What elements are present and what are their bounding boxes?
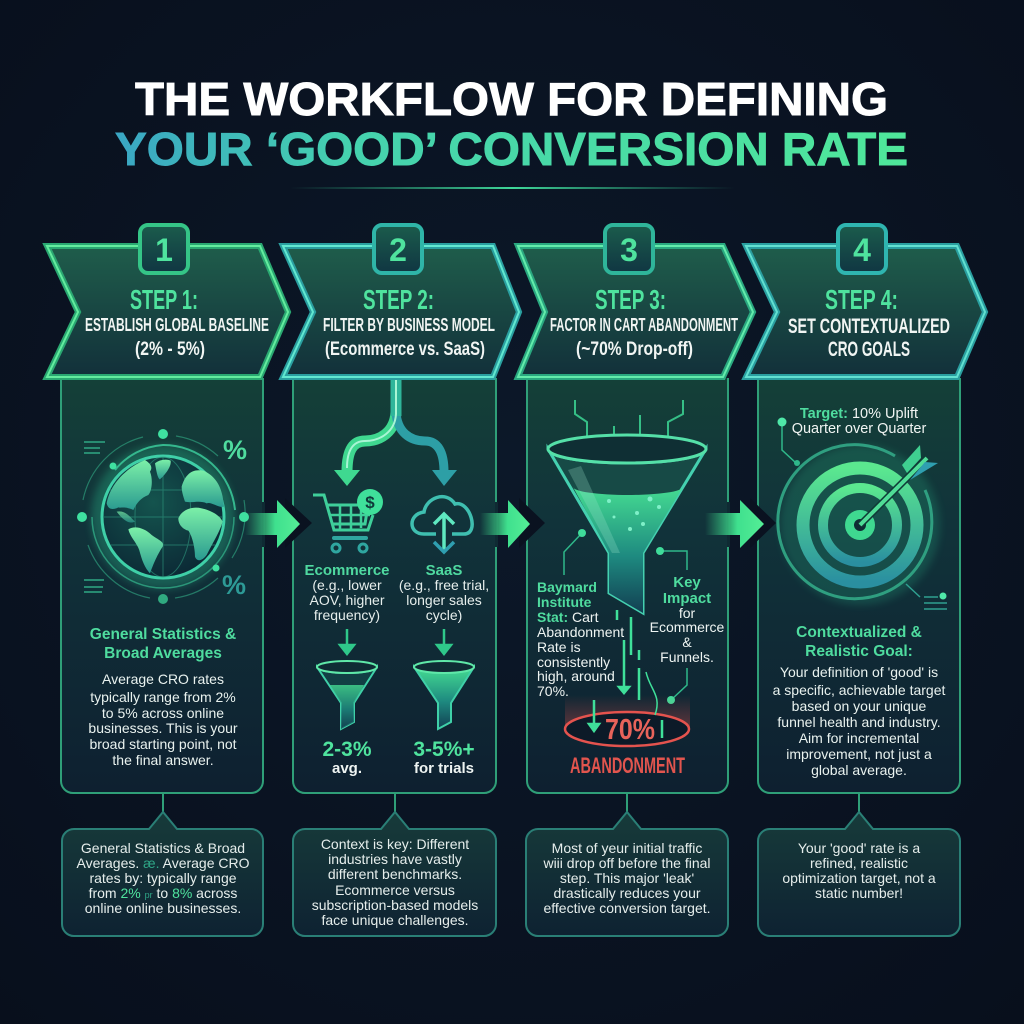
text: Ecommerce column: frequency) xyxy=(314,607,380,623)
text: SaaS column xyxy=(399,562,489,623)
chevron: step 3 xyxy=(518,246,753,377)
text: step 4 body: Aim for incremental xyxy=(799,730,919,746)
callout: step 4: Your 'good' rate is a xyxy=(798,840,920,856)
chevron: step 2: FILTER BY BUSINESS MODEL xyxy=(323,315,495,335)
text: step 1 body: to 5% across online xyxy=(102,705,224,721)
drips xyxy=(589,610,662,738)
callout: step 2: industries have vastly xyxy=(328,851,462,867)
chevron: step 2 xyxy=(283,246,519,377)
callout: step 3: effective conversion target. xyxy=(543,900,711,916)
text: Baymard stat: high, around xyxy=(537,668,615,684)
panel: step 2 body xyxy=(293,378,496,793)
number badge 4 xyxy=(838,225,886,273)
arrow: step 3 to 4 xyxy=(705,498,776,548)
callout: step 2: face unique challenges. xyxy=(321,912,469,928)
text: Baymard stat: consistently xyxy=(537,654,610,670)
text: Baymard stat: Rate is xyxy=(537,639,581,655)
title xyxy=(115,73,908,175)
callout: step 1 xyxy=(62,793,263,936)
number badge 4: 4 xyxy=(853,232,871,268)
text: step 4 body: global average. xyxy=(811,762,907,778)
text: step 4 body xyxy=(773,664,945,778)
stat: ecommerce: avg. xyxy=(332,760,362,777)
callout: step 3: drastically reduces your xyxy=(553,885,701,901)
title: YOUR ‘GOOD’ CONVERSION RATE xyxy=(115,123,908,175)
callout: step 2: Ecommerce versus xyxy=(335,882,455,898)
callout: step 3: step. This major 'leak' xyxy=(560,870,694,886)
icon: large funnel xyxy=(548,400,706,613)
callout: step 4 xyxy=(758,793,960,936)
number badge 1 xyxy=(140,225,188,273)
chevron: step 4 xyxy=(746,246,985,377)
text: step 4 body: based on your unique xyxy=(792,698,927,714)
callout: step 3: wiii drop off before the final xyxy=(542,855,711,871)
text: step 4 body: Your definition of 'good' is xyxy=(780,664,938,680)
callout: step 1: Averages. æ. Average CRO xyxy=(76,855,250,871)
stat: ecommerce xyxy=(322,738,372,777)
text: key impact: for xyxy=(679,605,696,621)
callout: step 2: Context is key: Different xyxy=(321,836,469,852)
text: Baymard stat xyxy=(537,579,624,699)
icon: target with arrow xyxy=(778,418,947,609)
text: Baymard stat: Abandonment xyxy=(537,624,624,640)
diagram: branching arrows to Ecommerce and SaaS xyxy=(334,380,457,486)
chevron: step 3: STEP 3: xyxy=(595,284,666,315)
text: step 4 body: funnel health and industry. xyxy=(777,714,941,730)
text: key impact: Impact xyxy=(663,590,711,607)
callout: step 4: refined, realistic xyxy=(810,855,908,871)
text: Baymard stat: Stat: Cart xyxy=(537,609,599,625)
number badge 3: 3 xyxy=(620,232,638,268)
icon: globe with orbit rings: % xyxy=(222,570,246,600)
text: SaaS column: (e.g., free trial, xyxy=(399,577,489,593)
chevron: step 1: (2% - 5%) xyxy=(135,339,205,360)
red abandonment pool: 70% xyxy=(605,714,655,746)
text: step 4 heading: Realistic Goal: xyxy=(805,643,913,660)
stat: ecommerce: 2-3% xyxy=(322,738,372,761)
text: step 1 body: Average CRO rates xyxy=(102,671,224,687)
number badge 2 xyxy=(374,225,422,273)
text: Ecommerce column: AOV, higher xyxy=(310,592,385,608)
text: Ecommerce column: (e.g., lower xyxy=(312,577,382,593)
icon: globe with orbit rings xyxy=(77,429,249,604)
callout: step 1: General Statistics & Broad xyxy=(81,840,245,856)
chevron: step 1: ESTABLISH GLOBAL BASELINE xyxy=(85,315,269,335)
text: Ecommerce column: Ecommerce xyxy=(304,562,390,579)
stat: saas: for trials xyxy=(414,760,474,777)
text: Baymard stat: Institute xyxy=(537,594,592,610)
text: SaaS column: longer sales xyxy=(406,592,482,608)
callout: step 3: Most of yeur initial traffic xyxy=(552,840,702,856)
text: Baymard stat: 70%. xyxy=(537,683,569,699)
red abandonment pool xyxy=(565,695,690,778)
text: SaaS column: cycle) xyxy=(426,607,462,623)
text: step 1 heading: Broad Averages xyxy=(104,645,222,662)
chevron: step 1 xyxy=(47,246,288,377)
number badge 1: 1 xyxy=(155,232,173,268)
chevron: step 3: (~70% Drop-off) xyxy=(576,339,693,360)
text: step 1 body: typically range from 2% xyxy=(90,689,236,705)
annotation dots xyxy=(578,529,675,704)
number badge 2: 2 xyxy=(389,232,407,268)
number badge 3 xyxy=(605,225,653,273)
chevron: step 3: FACTOR IN CART ABANDONMENT xyxy=(550,315,738,335)
icon: cloud with arrows xyxy=(412,497,472,552)
chevron: step 1: STEP 1: xyxy=(130,284,198,315)
panel: step 4 body xyxy=(758,378,960,793)
callout: step 2 xyxy=(293,793,496,936)
text: key impact: & xyxy=(682,634,692,650)
text: target: Target: 10% Uplift xyxy=(800,406,918,422)
text: key impact xyxy=(650,574,725,665)
text: key impact: Funnels. xyxy=(660,649,714,665)
text: step 4 heading: Contextualized & xyxy=(796,624,922,641)
icon: shopping cart with dollar: $ xyxy=(365,493,375,512)
icon: ecommerce funnel xyxy=(317,661,377,729)
chevron: step 4: SET CONTEXTUALIZED xyxy=(788,315,950,338)
stat: saas xyxy=(413,738,475,777)
title: THE WORKFLOW FOR DEFINING xyxy=(135,73,888,125)
red abandonment pool: ABANDONMENT xyxy=(570,753,685,778)
text: key impact: Key xyxy=(673,574,701,591)
callout: step 3 xyxy=(526,793,728,936)
text: step 4 heading xyxy=(796,624,922,660)
text: step 1 body: businesses. This is your xyxy=(88,720,238,736)
icon: saas funnel xyxy=(414,661,474,729)
text: step 1 body xyxy=(88,671,238,768)
callout: step 4: optimization target, not a xyxy=(782,870,936,886)
chevron: step 4: CRO GOALS xyxy=(828,338,910,361)
chevron: step 4: STEP 4: xyxy=(825,284,898,315)
text: step 4 body: improvement, not just a xyxy=(786,746,932,762)
stat: saas: 3-5%+ xyxy=(413,738,475,761)
panel: step 1 body xyxy=(61,378,263,793)
callout: step 2: subscription-based models xyxy=(312,897,478,913)
text: target xyxy=(792,406,926,437)
callout: step 1: rates by: typically range xyxy=(89,870,237,886)
text: step 1 heading: General Statistics & xyxy=(90,626,236,643)
callout: step 4: static number! xyxy=(815,885,903,901)
callout: step 2: different benchmarks. xyxy=(328,866,462,882)
icon: globe with orbit rings: % xyxy=(223,435,247,465)
text: step 1 heading xyxy=(90,626,236,662)
text: step 1 body: broad starting point, not xyxy=(89,736,237,752)
text: target: Quarter over Quarter xyxy=(792,421,926,437)
text: key impact: Ecommerce xyxy=(650,619,725,635)
text: step 4 body: a specific, achievable target xyxy=(773,682,945,698)
callout: step 1: from 2% pr to 8% across xyxy=(89,885,237,901)
text: step 1 body: the final answer. xyxy=(112,752,214,768)
text: Baymard stat: Baymard xyxy=(537,579,597,595)
arrow: step 2 to 3 xyxy=(480,498,545,548)
annotation leaders xyxy=(564,533,687,700)
chevron: step 2: (Ecommerce vs. SaaS) xyxy=(325,339,485,360)
text: Ecommerce column xyxy=(304,562,390,623)
callout: step 1: online online businesses. xyxy=(85,900,241,916)
icon: shopping cart with dollar xyxy=(313,489,383,552)
chevron: step 2: STEP 2: xyxy=(363,284,434,315)
arrow: step 1 to 2 xyxy=(245,498,312,548)
text: SaaS column: SaaS xyxy=(426,562,462,579)
panel: step 3 body xyxy=(527,378,728,793)
small arrows down xyxy=(340,629,451,654)
